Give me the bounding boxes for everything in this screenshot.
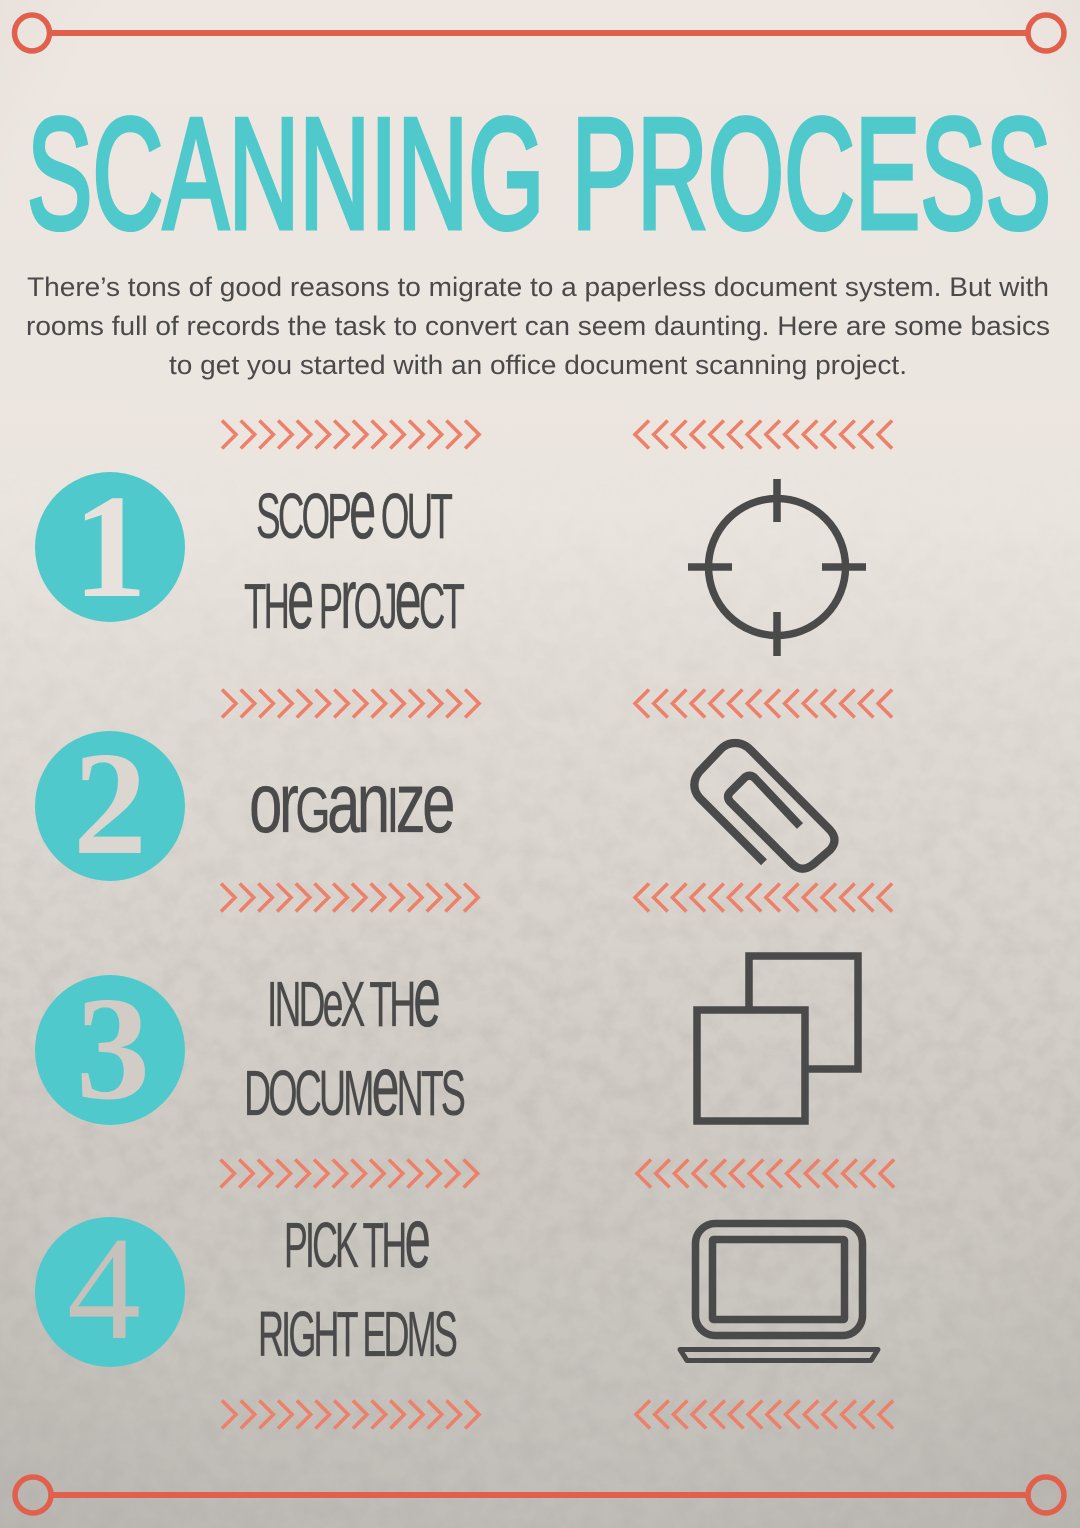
step 3 label: DOCUMeNTS [244,1039,464,1134]
step 1 label: SCOPe OUT [256,462,452,557]
intro text: There’s tons of good reasons to migrate to a paperless document system. But with [27,272,1049,302]
step 4 number badge [35,1207,185,1371]
step 4 label: RIGHT EDMS [258,1298,456,1370]
step 1 number badge: 1 [73,465,147,629]
intro text [26,272,1050,380]
intro text: rooms full of records the task to convert can seem daunting. Here are some basics [26,311,1050,341]
step 1 label [244,462,464,647]
icon: overlapping squares [697,956,858,1121]
step 3 label: INDeX THe [267,950,439,1045]
step 3 number badge: 3 [76,967,150,1131]
step 4 label [258,1191,456,1370]
step 1 label: THe PrOJeCT [244,552,464,647]
icon: crosshair target [688,479,866,656]
step 4 label: PICK THe [284,1191,429,1286]
step 3 label [244,950,464,1134]
chevron dividers: right-pointing column [220,420,479,1428]
icon: paperclip [694,743,834,869]
step 2 number badge [35,722,185,886]
bottom rule with end rings [15,1477,1064,1513]
intro text: to get you started with an office document scanning project. [169,350,907,380]
top rule with end rings [14,15,1064,51]
step 4 number badge: 4 [67,1207,141,1371]
step 1 number badge [35,465,185,629]
step 3 number badge [35,967,185,1131]
chevron dividers: left-pointing column [635,420,894,1428]
icon: laptop [680,1224,878,1360]
step 2 label: orGanIze [249,756,453,851]
step 2 number badge: 2 [73,722,147,886]
